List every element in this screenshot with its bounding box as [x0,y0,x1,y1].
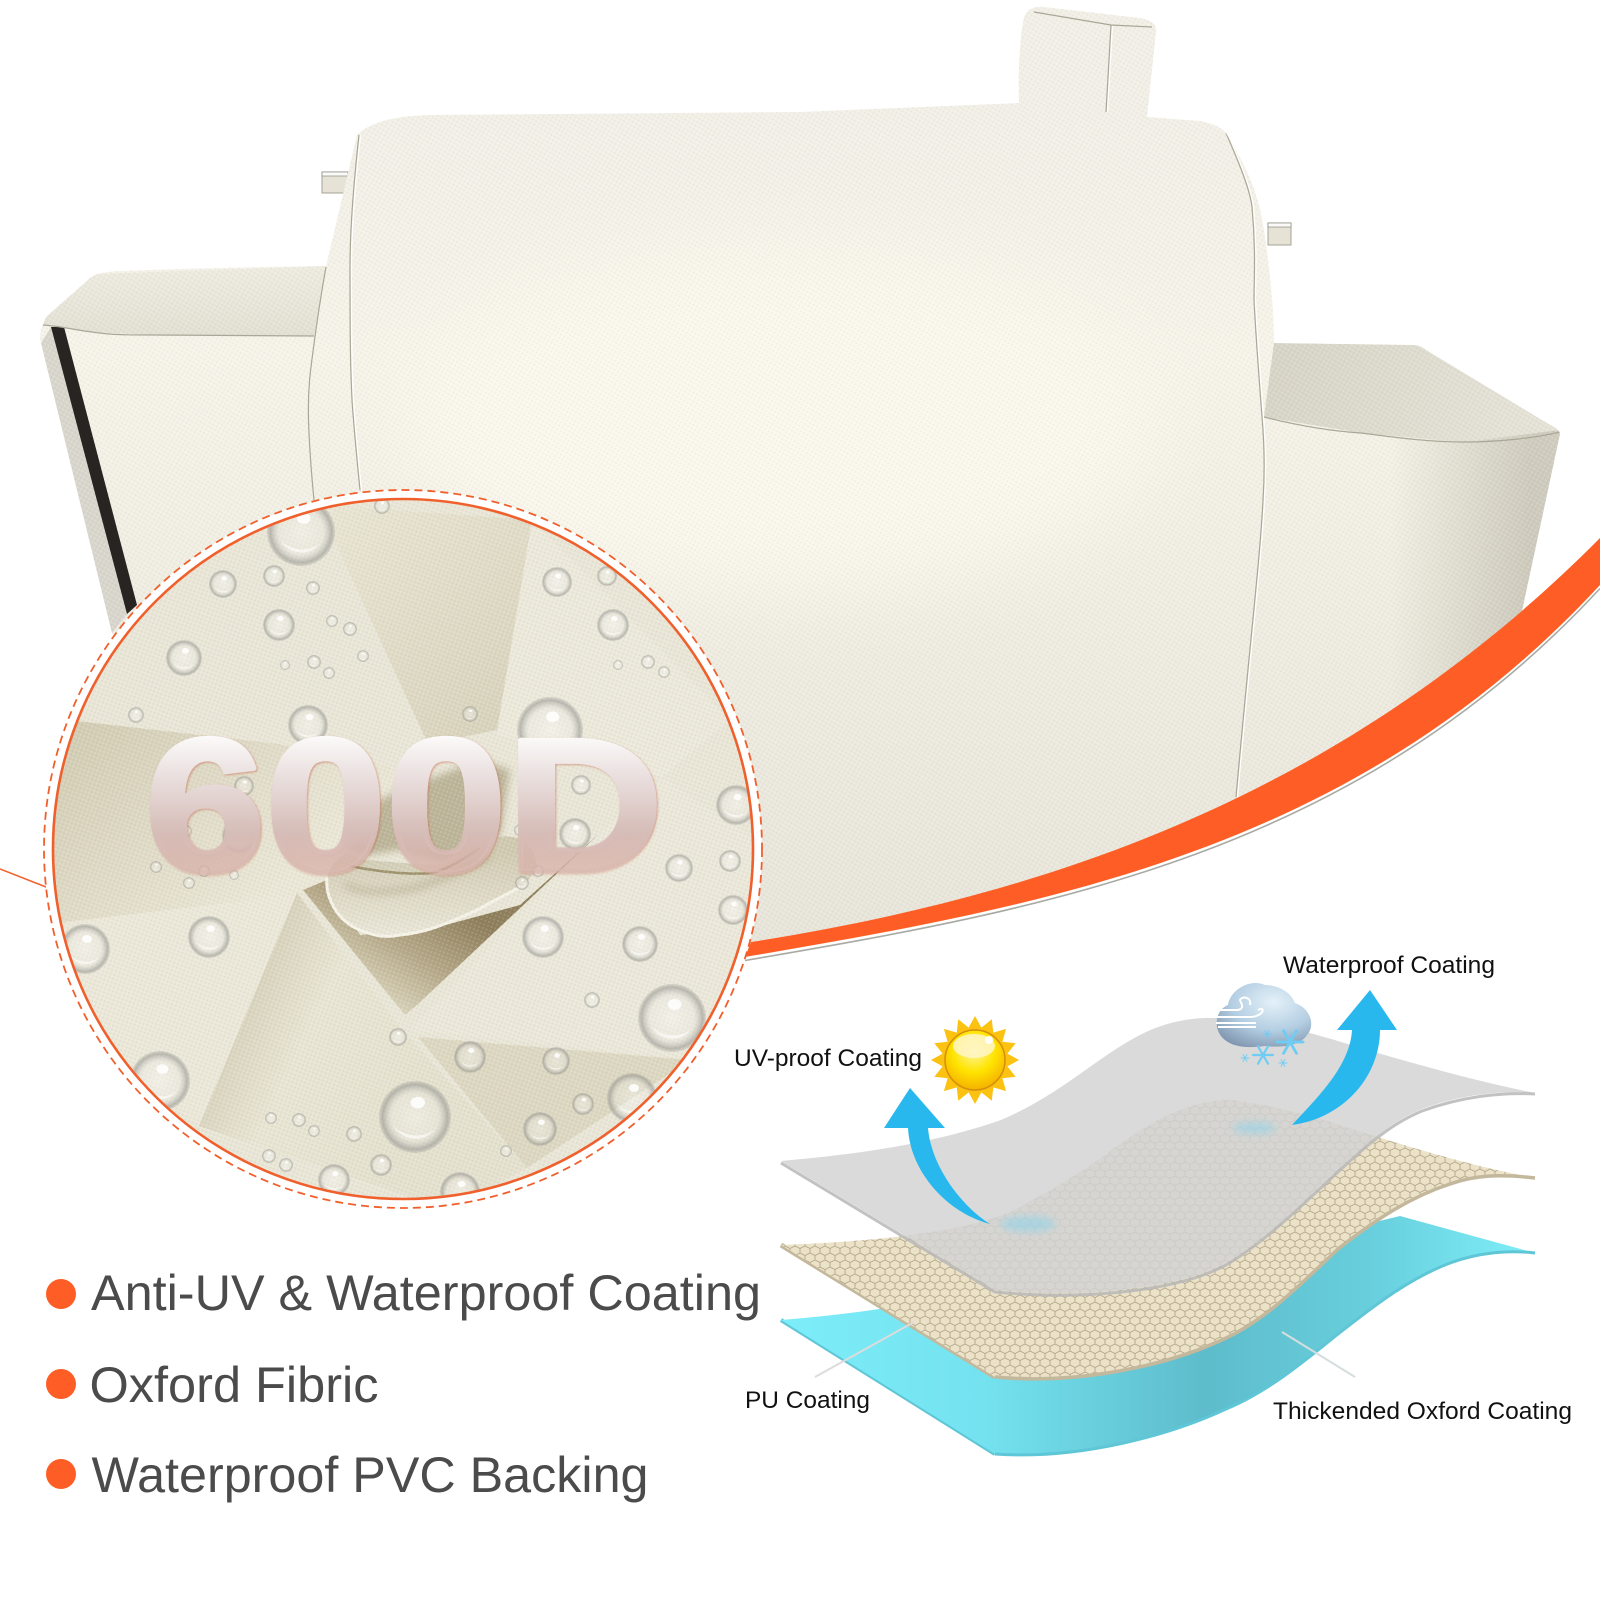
label: PU Coating: PU Coating [745,1387,870,1414]
seams [43,12,1560,797]
water droplets [60,498,756,1212]
circle inner border [53,499,753,1199]
layer: thickened Oxford (cyan) [781,1216,1535,1455]
layered fabric diagram [734,952,1572,1455]
cover body [40,6,1560,942]
arrow: left blue [884,1088,990,1224]
layer: PU coating (beige hexagons) [781,1100,1535,1379]
pointer line: PU coating [815,1322,914,1377]
fabric knot [327,836,537,936]
label: Waterproof Coating: Waterproof Coating [1283,952,1495,979]
bullet: Waterproof PVC Backing: Waterproof PVC Backing [92,1447,648,1503]
thin orange line at left of circle [0,869,46,887]
feature list [46,1265,761,1503]
handle: left [322,172,348,193]
handle: right [1268,223,1291,245]
label: Thickended Oxford Coating: Thickended Oxford Coating [1273,1398,1572,1425]
dark fold behind knot [303,833,600,1015]
600D label: 600D [145,700,663,912]
bullet: Oxford Fibric: Oxford Fibric [90,1357,378,1413]
orange swoosh with white edge [745,538,1600,960]
fabric photo [40,490,770,1212]
grill cover [40,6,1560,942]
circle ring [44,490,762,1208]
blue water patches [1000,1122,1276,1232]
icon: sun [931,1016,1019,1104]
layer: gray top coating [781,1018,1535,1295]
magnified fabric circle [40,490,770,1212]
arrow: right blue [1292,990,1397,1125]
icon: snow cloud [1212,983,1311,1066]
black strap [51,327,137,614]
label: UV-proof Coating: UV-proof Coating [734,1045,922,1072]
pointer line: Oxford coating [1282,1332,1355,1377]
bullet: Anti-UV & Waterproof Coating: Anti-UV & Waterproof Coating [91,1265,761,1321]
